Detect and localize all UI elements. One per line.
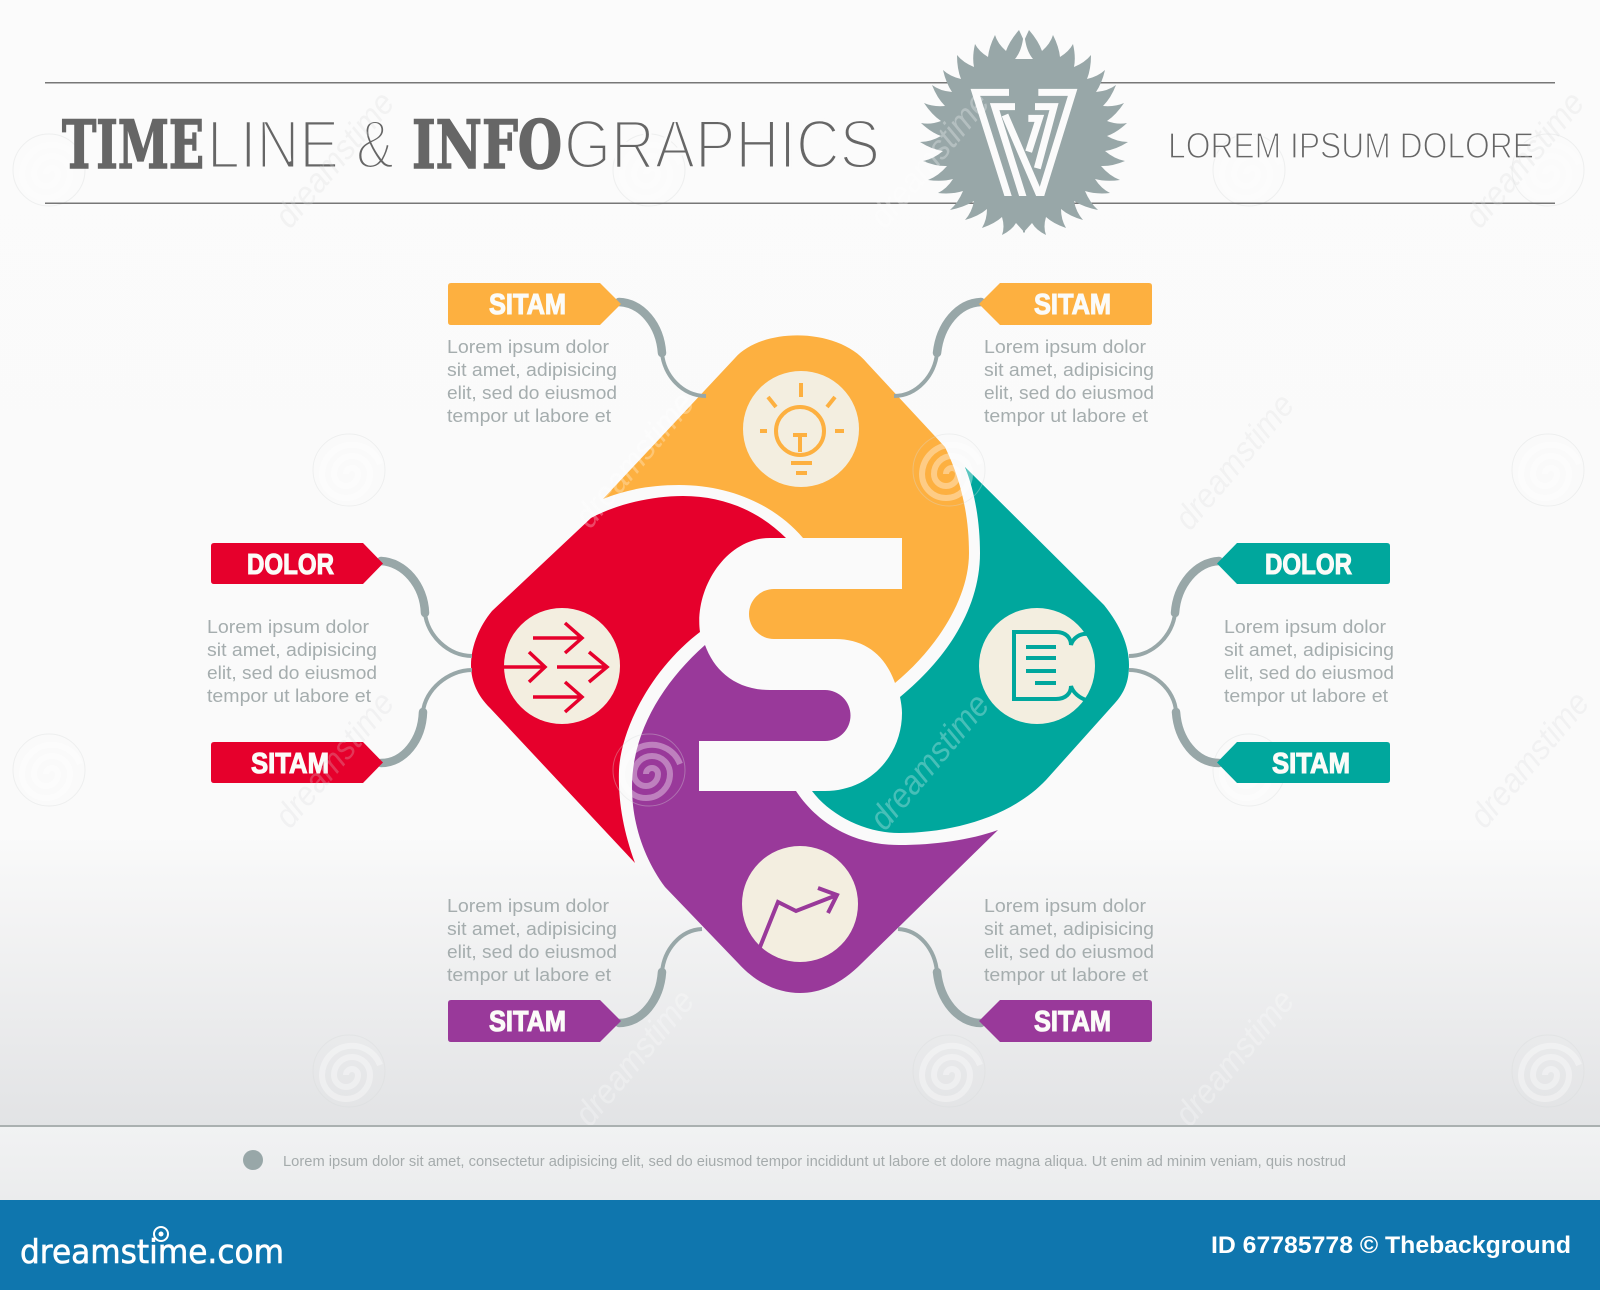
text block: tempor ut labore et xyxy=(1224,685,1388,706)
text block: sit amet, adipisicing xyxy=(984,918,1154,939)
callout: bottom left xyxy=(447,895,702,1042)
credit bar xyxy=(0,1200,1600,1290)
title: INFO xyxy=(412,106,562,184)
icon: light bulb xyxy=(743,371,859,487)
text block: tempor ut labore et xyxy=(984,964,1148,985)
text block xyxy=(984,895,1154,985)
text block xyxy=(207,616,377,706)
text: dreamstime xyxy=(267,684,402,835)
callout: left xyxy=(207,543,472,783)
text block: Lorem ipsum dolor xyxy=(1224,616,1386,637)
text block: sit amet, adipisicing xyxy=(1224,639,1394,660)
footer bullet xyxy=(243,1150,263,1170)
text block: sit amet, adipisicing xyxy=(447,918,617,939)
tag xyxy=(979,283,1152,325)
tag xyxy=(211,543,383,584)
tag label: SITAM xyxy=(1272,748,1350,780)
text: dreamstime xyxy=(567,982,702,1133)
tag label: SITAM xyxy=(1034,289,1111,321)
text block: Lorem ipsum dolor xyxy=(984,895,1146,916)
text block: Lorem ipsum dolor xyxy=(447,336,609,357)
callout: bottom right xyxy=(898,895,1154,1042)
callout: top right xyxy=(894,283,1154,426)
image id credit: ID 67785778 © Thebackground xyxy=(1211,1232,1571,1259)
tag xyxy=(211,742,383,783)
title: TIME xyxy=(62,106,204,184)
tag label: SITAM xyxy=(489,1006,566,1038)
title: LINE xyxy=(207,106,339,183)
text block: Lorem ipsum dolor xyxy=(447,895,609,916)
connector xyxy=(898,929,981,1023)
title: GRAPHICS xyxy=(564,106,880,183)
brand logo: dreamstime.com xyxy=(20,1232,284,1271)
text block: Lorem ipsum dolor xyxy=(207,616,369,637)
icon: arrows xyxy=(504,608,620,724)
header rule bottom xyxy=(45,202,1555,204)
text block xyxy=(447,336,617,426)
text block: tempor ut labore et xyxy=(984,405,1148,426)
text: dreamstime xyxy=(1167,982,1302,1133)
text block: tempor ut labore et xyxy=(447,405,611,426)
tag xyxy=(448,1000,621,1042)
text block: elit, sed do eiusmod xyxy=(984,941,1154,962)
segment: teal xyxy=(812,467,1129,833)
text block xyxy=(1224,616,1394,706)
text block: elit, sed do eiusmod xyxy=(447,941,617,962)
text block: elit, sed do eiusmod xyxy=(447,382,617,403)
tag label: DOLOR xyxy=(247,549,334,581)
text block xyxy=(984,336,1154,426)
text: dreamstime xyxy=(267,84,402,235)
text: dreamstime xyxy=(862,84,997,235)
tag xyxy=(979,1000,1152,1042)
header rule top xyxy=(45,82,1555,84)
text block: sit amet, adipisicing xyxy=(207,639,377,660)
tag xyxy=(1217,543,1390,584)
connector xyxy=(381,561,472,763)
footer note: Lorem ipsum dolor sit amet, consectetur adipisicing elit, sed do eiusmod tempor incididunt ut labore et dolore magna aliqua. Ut enim ad minim veniam, quis nostrud xyxy=(283,1154,1346,1170)
callout: right xyxy=(1129,543,1394,783)
icon: growth line xyxy=(742,846,858,962)
title xyxy=(62,106,880,184)
tag xyxy=(1217,742,1390,783)
text block: tempor ut labore et xyxy=(207,685,371,706)
title: & xyxy=(356,106,394,183)
tag xyxy=(448,283,621,325)
text: dreamstime xyxy=(567,384,702,535)
text: dreamstime xyxy=(862,686,997,837)
text block: elit, sed do eiusmod xyxy=(207,662,377,683)
text: dreamstime xyxy=(1457,84,1592,235)
subtitle: LOREM IPSUM DOLORE xyxy=(1168,125,1534,166)
footer rule xyxy=(0,1125,1600,1127)
segment: orange xyxy=(603,335,969,683)
connector xyxy=(619,929,702,1023)
connector xyxy=(1129,561,1219,763)
text: dreamstime xyxy=(1167,386,1302,537)
badge: V mark xyxy=(975,92,1073,200)
footer strip xyxy=(0,1127,1600,1200)
badge: laurel emblem xyxy=(920,30,1128,235)
text block: Lorem ipsum dolor xyxy=(984,336,1146,357)
text block: sit amet, adipisicing xyxy=(447,359,617,380)
text block: sit amet, adipisicing xyxy=(984,359,1154,380)
tag label: SITAM xyxy=(489,289,566,321)
text block xyxy=(447,895,617,985)
text block: elit, sed do eiusmod xyxy=(1224,662,1394,683)
icon: document xyxy=(979,608,1095,724)
callout: top left xyxy=(447,283,706,426)
segment: red xyxy=(471,496,786,863)
text block: tempor ut labore et xyxy=(447,964,611,985)
segment: purple xyxy=(632,645,998,993)
tag label: DOLOR xyxy=(1265,549,1352,581)
tag label: SITAM xyxy=(251,748,329,780)
central S diagram xyxy=(471,335,1129,993)
connector xyxy=(619,302,706,396)
connector xyxy=(894,302,981,396)
tag label: SITAM xyxy=(1034,1006,1111,1038)
text block: elit, sed do eiusmod xyxy=(984,382,1154,403)
